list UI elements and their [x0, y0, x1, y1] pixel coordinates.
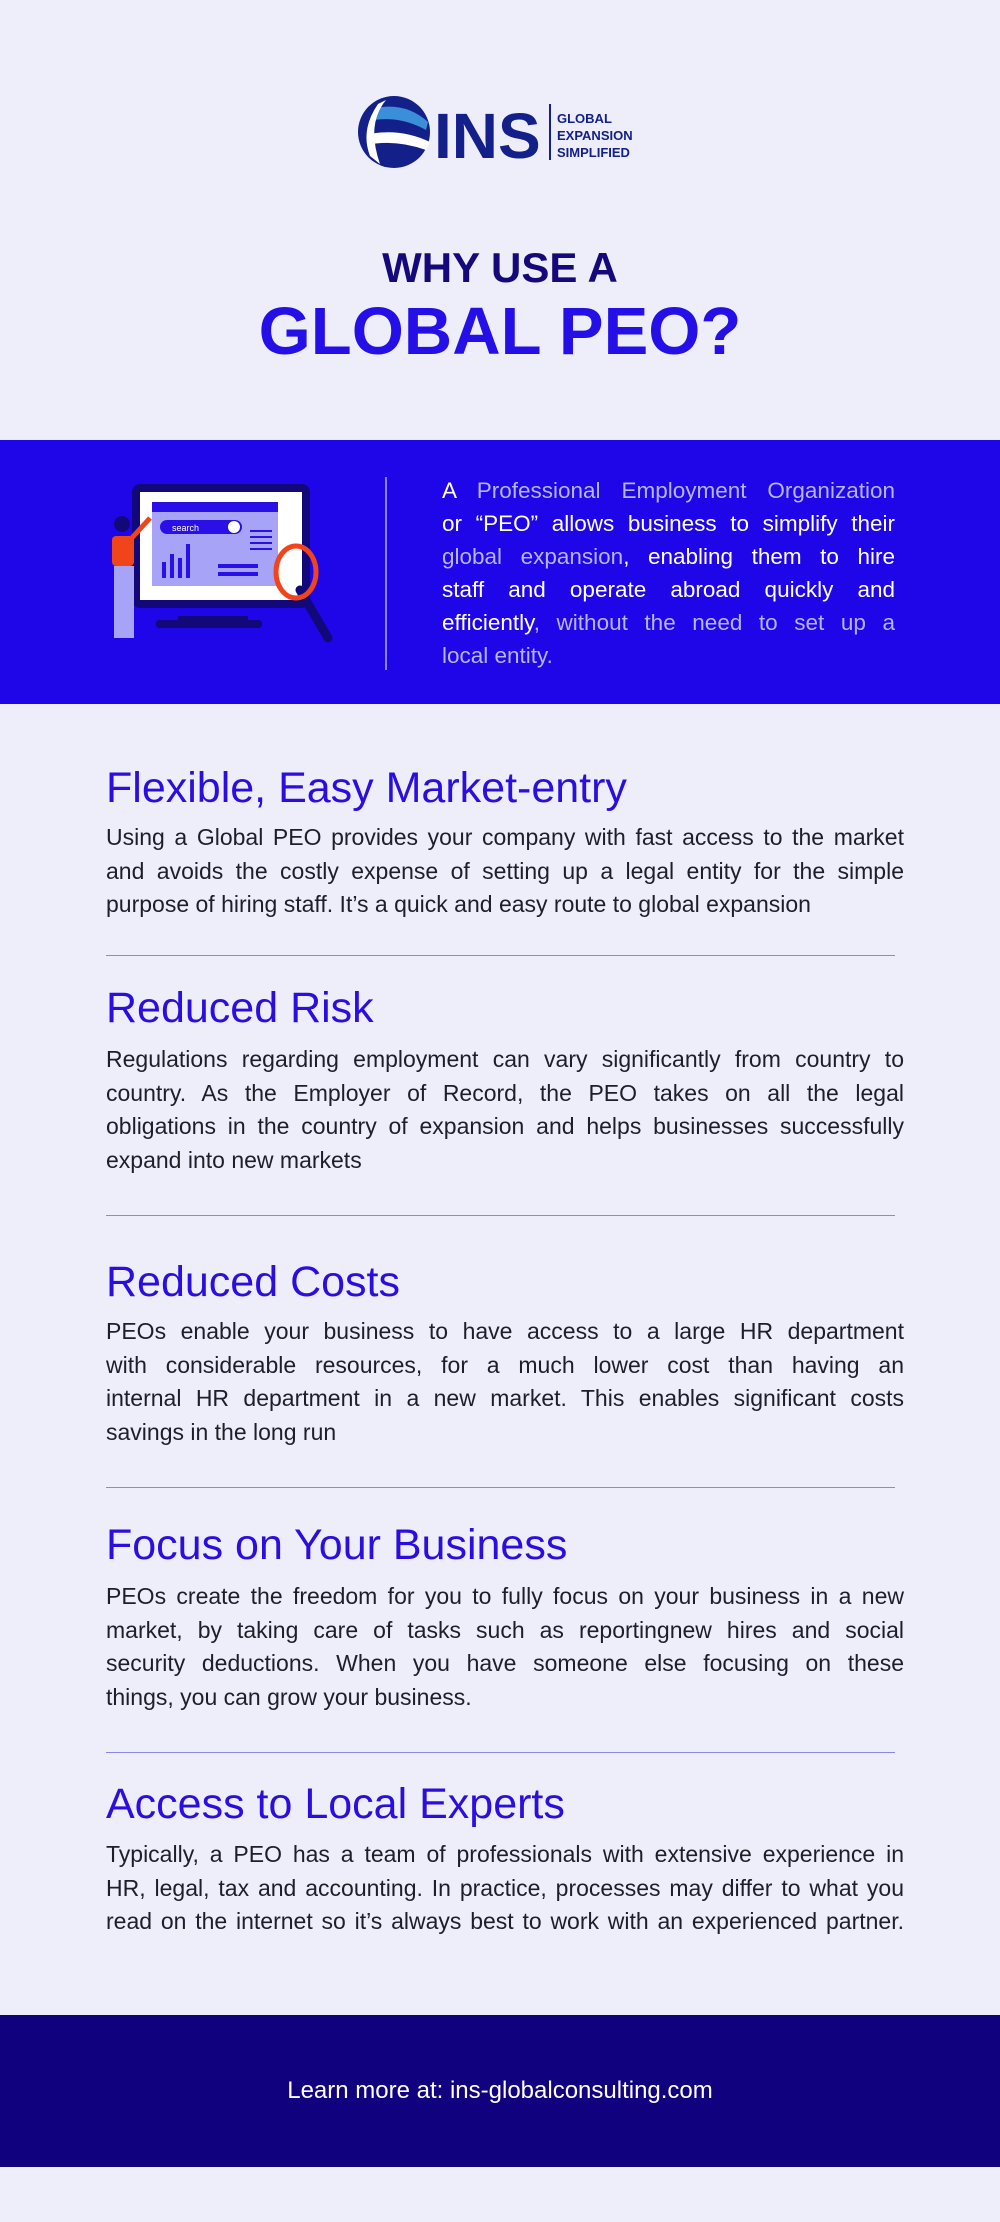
- heading: Focus: Focus on Your Business: [106, 1521, 567, 1569]
- text: Access: [106, 1841, 904, 1934]
- logo: GLOBAL: [557, 111, 612, 126]
- logo: [358, 96, 633, 170]
- text: Focus: things, you can grow your business.: [106, 1684, 472, 1710]
- icon: globe: [358, 96, 430, 168]
- text: Focus: market, by taking care of tasks such as reportingnew hires and social: [106, 1616, 904, 1642]
- text: Access: Typically, a PEO has a team of professionals with extensive experience in: [106, 1841, 904, 1867]
- heading: Reduced Costs: Reduced Costs: [106, 1258, 400, 1306]
- text: Reduced Costs: savings in the long run: [106, 1418, 336, 1444]
- text: Reduced Costs: PEOs enable your business to have access to a large HR department: [106, 1318, 904, 1344]
- text: Reduced Costs: with considerable resources, for a much lower cost than having an: [106, 1352, 904, 1378]
- intro text: global expansion, enabling them to hire: [442, 544, 895, 569]
- divider line: [385, 477, 387, 670]
- intro text: A Professional Employment Organization: [442, 478, 895, 503]
- text: Access: read on the internet so it’s always best to work with an experienced partner.: [106, 1908, 904, 1934]
- text: Flexible: purpose of hiring staff. It’s a quick and easy route to global expansion: [106, 891, 811, 917]
- text: Reduced Costs: internal HR department in a new market. This enables significant costs: [106, 1385, 904, 1411]
- text: Access: HR, legal, tax and accounting. In practice, processes may differ to what you: [106, 1874, 904, 1900]
- text: Reduced Risk: obligations in the country of expansion and helps businesses successfully: [106, 1113, 904, 1139]
- text: Flexible: [106, 824, 904, 917]
- heading: Reduced Risk: Reduced Risk: [106, 984, 374, 1032]
- text: Focus: PEOs create the freedom for you to fully focus on your business in a new: [106, 1583, 904, 1609]
- logo: EXPANSION: [557, 128, 633, 143]
- panel: intro band: [0, 440, 1000, 704]
- heading: Access: Access to Local Experts: [106, 1780, 565, 1828]
- title: WHY USE A: [382, 244, 618, 291]
- intro text: local entity.: [442, 643, 553, 668]
- illustration: person with monitor and magnifier: [112, 484, 332, 642]
- logo text: INS: [434, 100, 541, 170]
- illustration: person with monitor and magnifier: search: [172, 523, 199, 533]
- text: Flexible: Using a Global PEO provides your company with fast access to the market: [106, 824, 904, 850]
- heading: Flexible: Flexible, Easy Market-entry: [106, 764, 627, 812]
- text: Focus: security deductions. When you have someone else focusing on these: [106, 1650, 904, 1676]
- text: Focus: [106, 1583, 904, 1710]
- text: Reduced Risk: Regulations regarding employment can vary significantly from country to: [106, 1046, 904, 1072]
- intro text: [442, 478, 895, 668]
- title: GLOBAL PEO?: [259, 294, 741, 369]
- logo: SIMPLIFIED: [557, 145, 630, 160]
- text: Flexible: and avoids the costly expense of setting up a legal entity for the simple: [106, 858, 904, 884]
- text: Reduced Risk: expand into new markets: [106, 1146, 362, 1172]
- footer: [0, 2015, 1000, 2167]
- text: Reduced Costs: [106, 1318, 904, 1445]
- footer: Learn more at: ins-globalconsulting.com: [287, 2077, 713, 2104]
- title: [259, 244, 741, 369]
- intro text: or “PEO” allows business to simplify their: [442, 511, 895, 536]
- text: Reduced Risk: country. As the Employer of Record, the PEO takes on all the legal: [106, 1080, 904, 1106]
- intro text: efficiently, without the need to set up a: [442, 610, 895, 635]
- intro text: staff and operate abroad quickly and: [442, 577, 895, 602]
- text: Reduced Risk: [106, 1046, 904, 1173]
